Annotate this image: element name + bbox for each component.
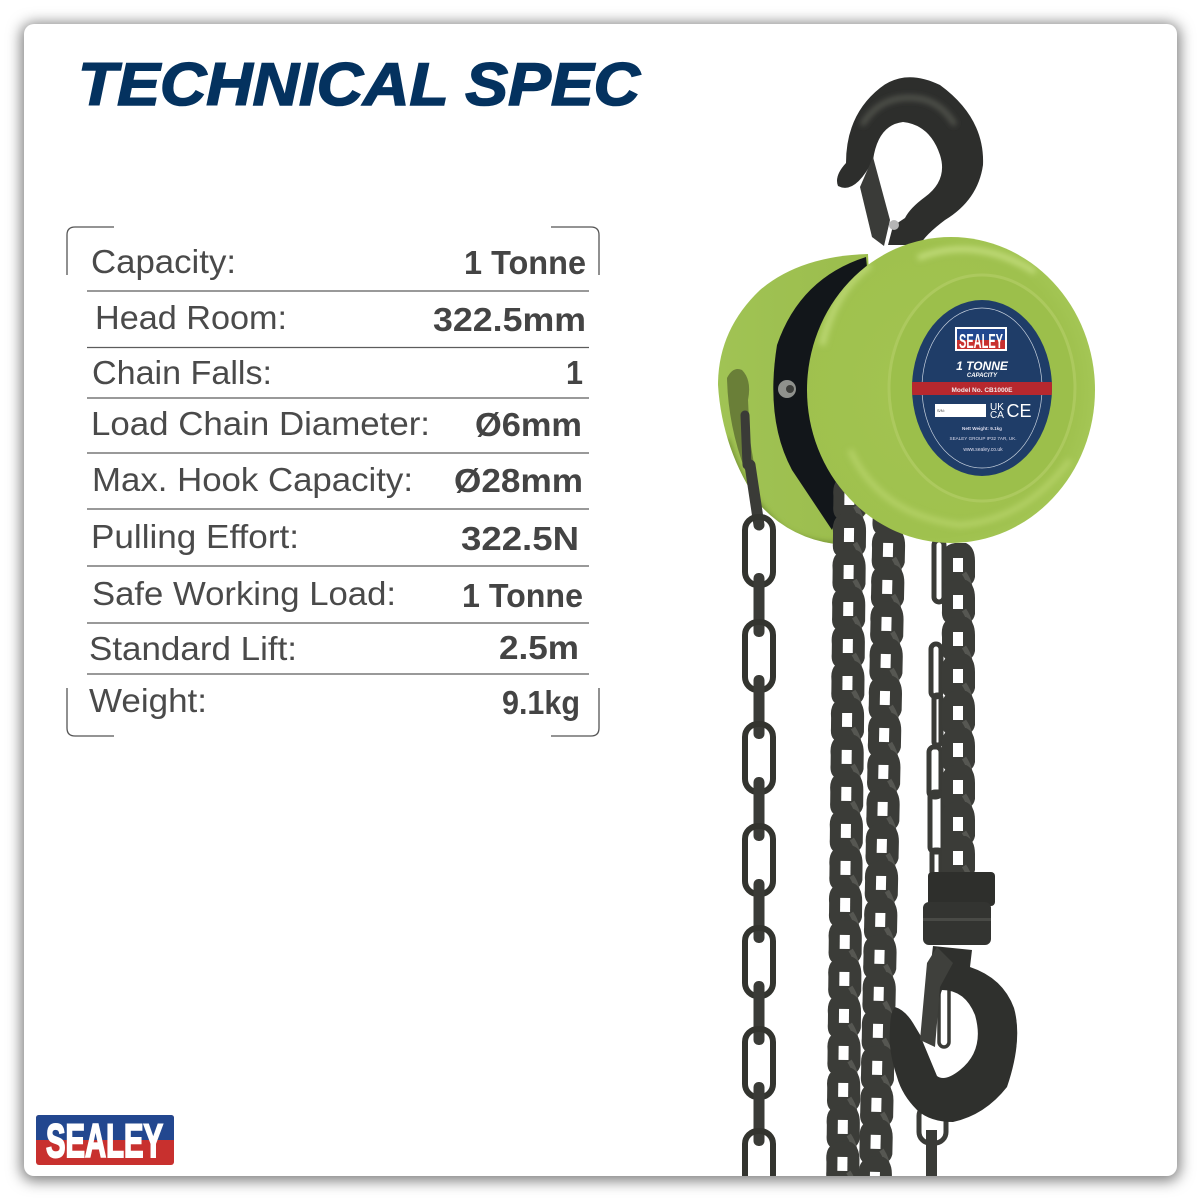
row: chain falls <box>92 354 583 391</box>
row: capacity: 1 Tonne <box>464 244 586 281</box>
top hook <box>837 77 983 246</box>
product label <box>912 300 1052 476</box>
brand logo <box>36 1114 174 1167</box>
row: pulling effort: 322.5N <box>461 520 579 557</box>
product label: UK <box>990 402 1004 413</box>
hook safety latch <box>920 947 953 1047</box>
row: weight: 9.1kg <box>502 684 580 721</box>
row: head room: 322.5mm <box>433 301 586 338</box>
hoist front drum <box>807 237 1095 543</box>
row: load chain diameter: Load Chain Diameter: <box>91 405 430 442</box>
product label: CAPACITY <box>967 373 998 379</box>
row: safe working load: Safe Working Load: <box>92 575 396 612</box>
product label: Model No. CB1000E <box>951 387 1013 394</box>
row: load chain diameter: Ø6mm <box>475 406 582 443</box>
table corner brackets <box>67 227 599 736</box>
product label: S/N: <box>937 408 945 413</box>
row: standard lift: 2.5m <box>499 629 579 666</box>
row: capacity: Capacity: <box>91 243 236 280</box>
product label: SEALEY GROUP IP32 7AR, UK. <box>950 436 1016 441</box>
load chain falls <box>826 476 906 1200</box>
row: weight <box>89 682 580 721</box>
product label: Nett Weight: 9.1kg <box>962 426 1002 431</box>
row: max hook capacity: Ø28mm <box>454 462 583 499</box>
row: safe working load <box>92 575 583 614</box>
row: max hook capacity <box>92 461 583 499</box>
product label: SEALEY <box>959 331 1003 353</box>
row: head room: Head Room: <box>95 299 287 336</box>
product label: 1 TONNE <box>956 359 1009 373</box>
product label: CA <box>990 410 1004 421</box>
row: standard lift: Standard Lift: <box>89 630 297 667</box>
product label: www.sealey.co.uk <box>963 447 1003 453</box>
row: load chain diameter <box>91 405 582 443</box>
row: weight: Weight: <box>89 682 207 719</box>
row: capacity <box>91 243 586 281</box>
left hand chain <box>745 415 773 1199</box>
row: max hook capacity: Max. Hook Capacity: <box>92 461 413 498</box>
row: pulling effort: Pulling Effort: <box>91 518 299 555</box>
rear drum lower shadow band <box>724 440 835 547</box>
front drum raised rim <box>889 275 1075 501</box>
row: chain falls: 1 <box>566 354 583 391</box>
black centre plate <box>773 257 867 530</box>
bottom hook <box>890 946 1017 1122</box>
bolt <box>778 380 796 398</box>
row: standard lift <box>89 629 579 667</box>
right chain to bottom hook <box>919 540 975 1180</box>
row: pulling effort <box>91 518 579 557</box>
product label: CE <box>1006 401 1032 421</box>
panel: specification table <box>67 227 599 736</box>
row: safe working load: 1 Tonne <box>462 577 583 614</box>
row: head room <box>95 299 586 338</box>
front drum highlights <box>822 249 1070 525</box>
brand logo: SEALEY <box>46 1114 163 1167</box>
bottom hook block <box>923 872 995 945</box>
hoist rear drum <box>718 254 880 544</box>
title: TECHNICAL SPEC <box>78 51 642 118</box>
rear drum chain slot <box>727 369 755 470</box>
row: chain falls: Chain Falls: <box>92 354 272 391</box>
product illustration: chain hoist <box>718 77 1095 1200</box>
